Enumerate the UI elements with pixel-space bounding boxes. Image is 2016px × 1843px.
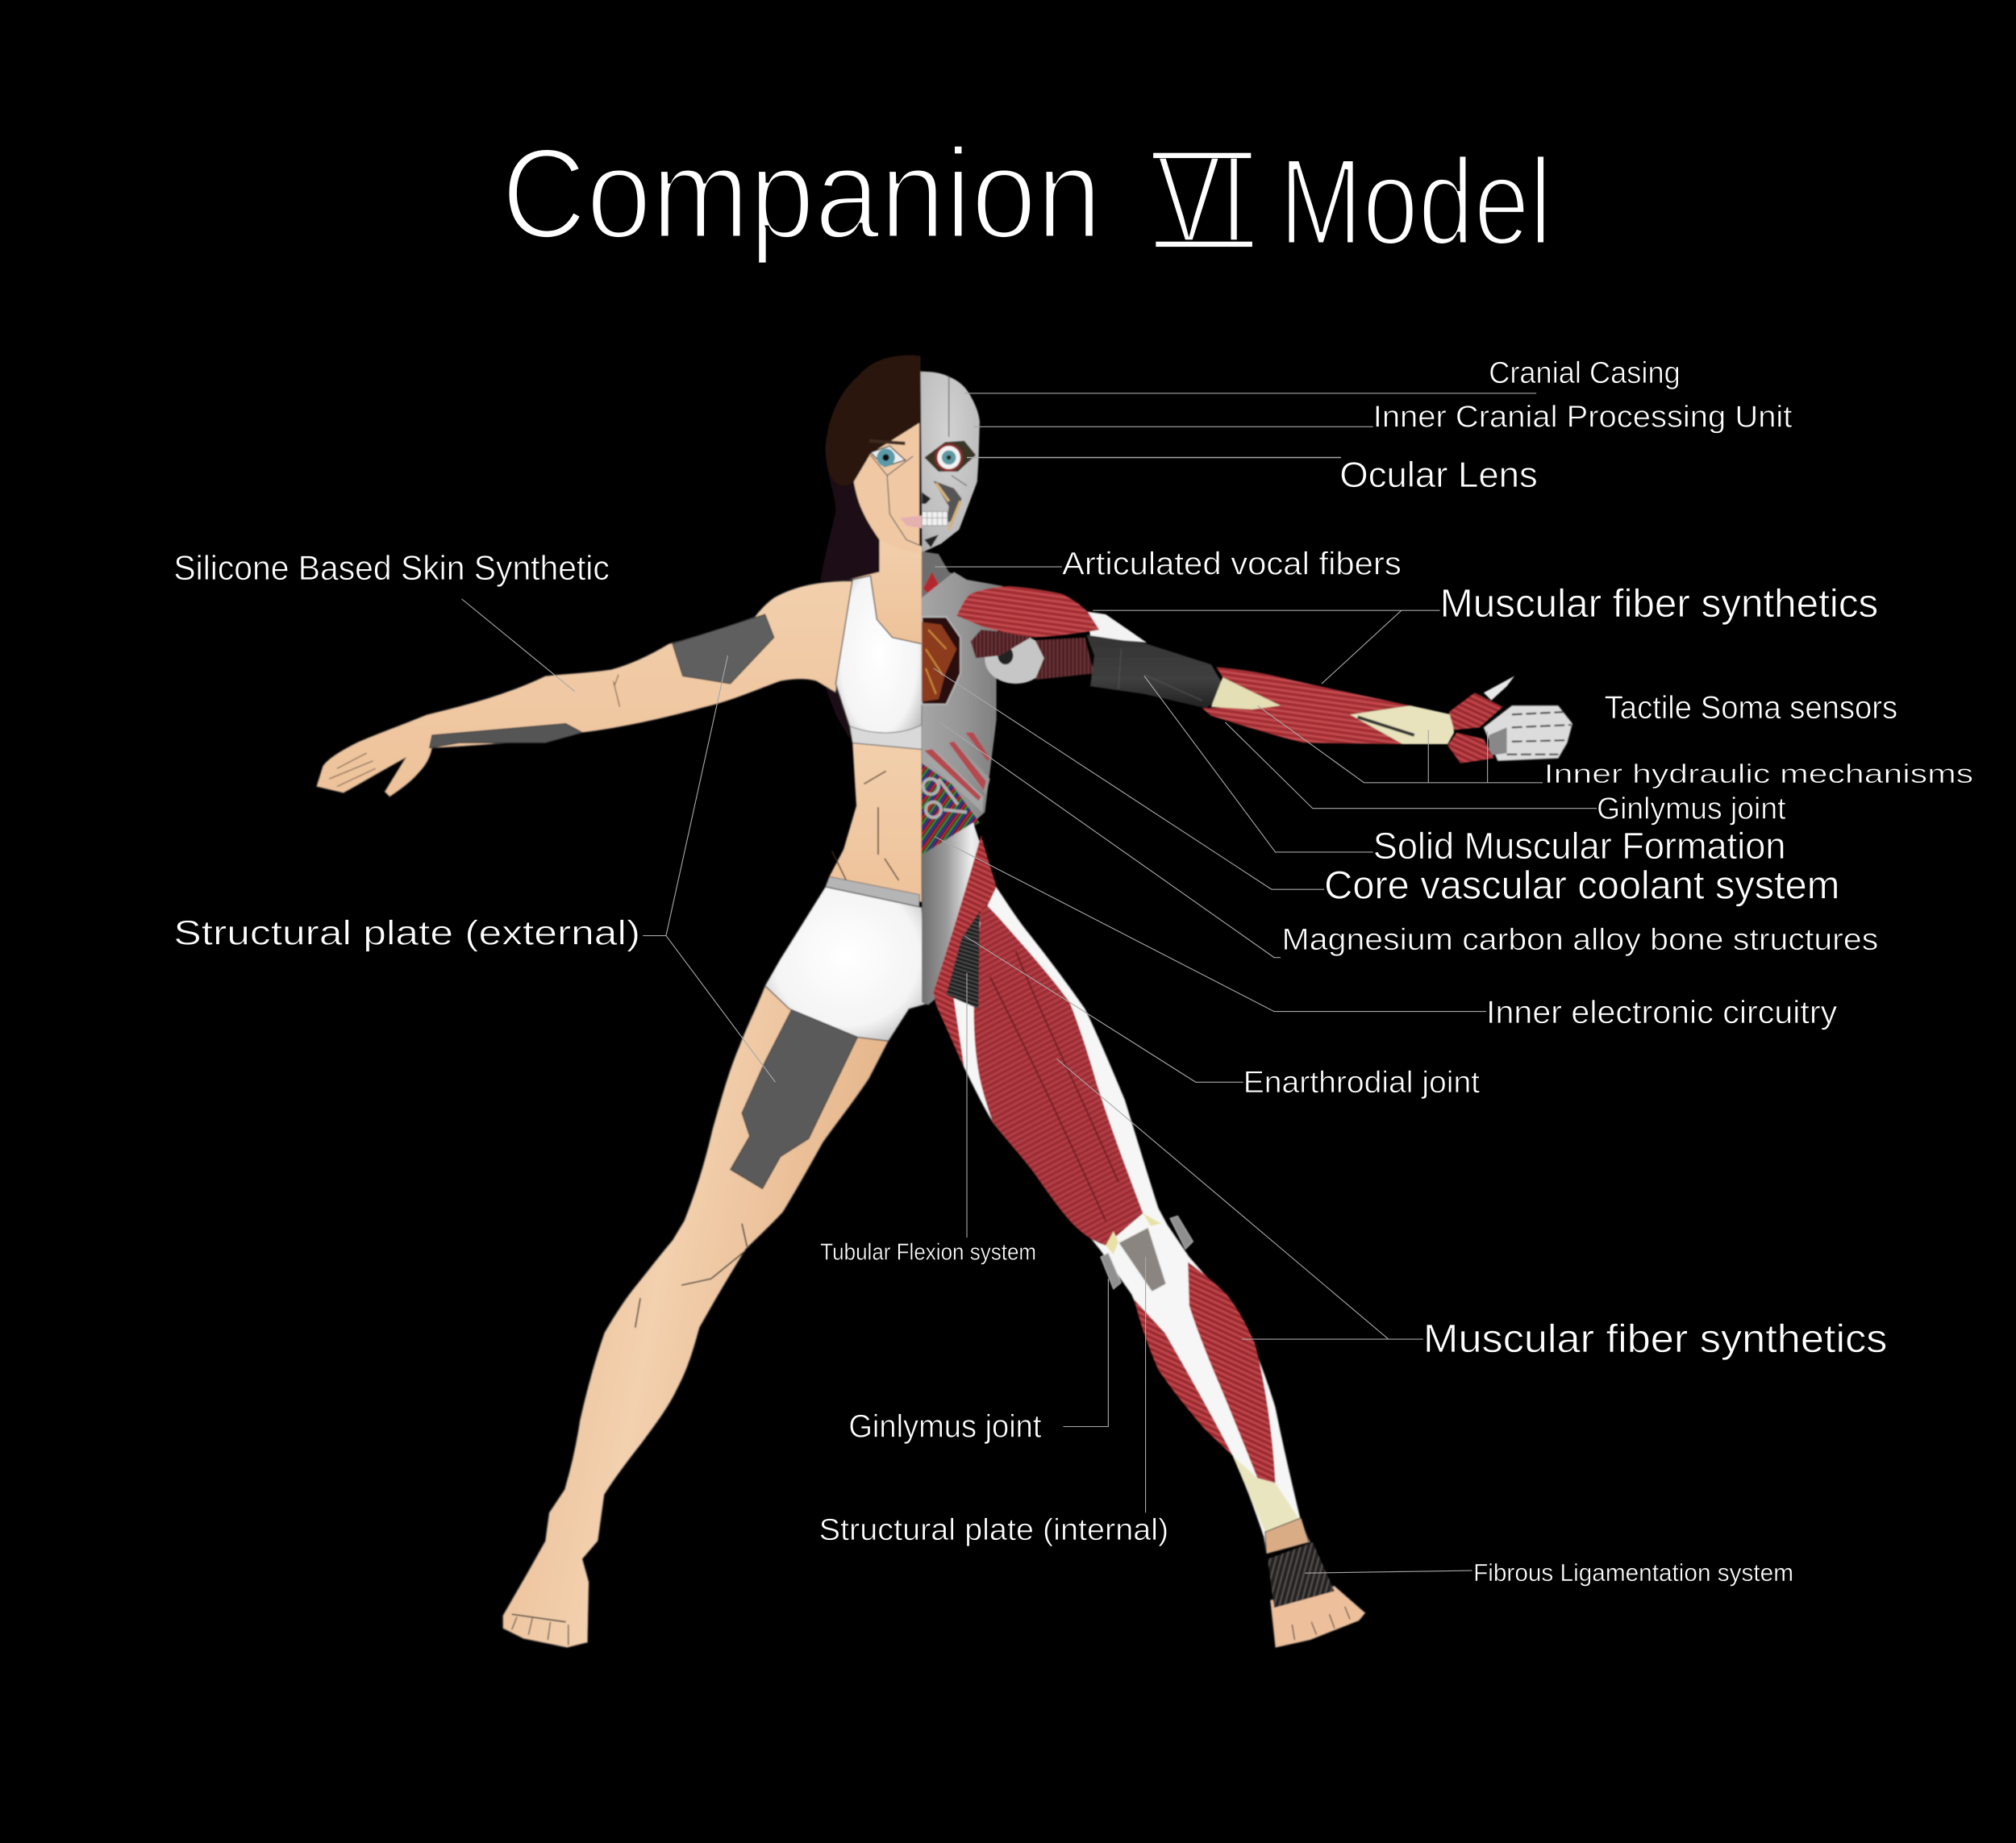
title: Companion xyxy=(502,122,1102,265)
thenar muscle xyxy=(1449,693,1503,730)
hair: back section xyxy=(820,356,921,739)
elbow tendon xyxy=(1211,677,1281,709)
hip casing xyxy=(922,822,993,1005)
ocular lens xyxy=(924,441,976,472)
white arm casing xyxy=(1088,612,1147,643)
elbow crease xyxy=(614,675,620,707)
forearm external plate xyxy=(430,724,582,748)
shorts waistband xyxy=(826,876,919,907)
knee joint side plates xyxy=(1101,1216,1193,1289)
fibrous ligament xyxy=(1268,1542,1335,1608)
label: Solid Muscular Formation: Solid Muscular Formation xyxy=(1373,825,1785,867)
joint socket xyxy=(998,647,1013,664)
upper arm external plate xyxy=(673,614,774,684)
deltoid muscle xyxy=(956,586,1099,638)
inner electronic circuitry xyxy=(946,911,980,1009)
label: Ginlymus joint (leg): Ginlymus joint xyxy=(848,1408,1041,1444)
hypothenar muscle xyxy=(1447,733,1494,763)
label: Inner hydraulic mechanisms: Inner hydraulic mechanisms xyxy=(1544,759,1973,789)
label: Structural plate (internal): Structural plate (internal) xyxy=(819,1512,1168,1547)
thumb bone xyxy=(1484,676,1514,701)
toes xyxy=(512,1616,569,1645)
forearm lower muscle xyxy=(1202,705,1402,744)
spine and gut rings xyxy=(923,779,967,817)
robotic neck xyxy=(922,551,967,597)
calf muscle xyxy=(1188,1262,1276,1483)
muscular rib strips xyxy=(924,733,990,801)
left leg xyxy=(503,986,889,1648)
chest casing xyxy=(922,572,1003,822)
label: Tubular Flexion system: Tubular Flexion system xyxy=(820,1239,1036,1265)
dark pectoral muscle xyxy=(971,630,1035,658)
jaw cavity and teeth xyxy=(922,481,962,547)
lips and face panel lines xyxy=(870,455,922,547)
foot skin xyxy=(1270,1586,1365,1648)
label: Fibrous Ligamentation system: Fibrous Ligamentation system xyxy=(1473,1560,1793,1587)
bra band shading xyxy=(850,725,922,749)
hand skeleton xyxy=(1484,705,1572,761)
ankle bands xyxy=(1265,1518,1309,1554)
sartorius muscle xyxy=(934,835,997,1068)
midriff xyxy=(829,743,922,902)
thigh muscle seams xyxy=(990,951,1118,1221)
thigh muscle xyxy=(974,901,1143,1246)
label: Enarthrodial joint: Enarthrodial joint xyxy=(1243,1065,1480,1100)
dark upper-arm muscle xyxy=(1035,638,1094,680)
title: VI xyxy=(1157,131,1248,268)
figure: human-skin half and robotic half xyxy=(316,356,1572,1648)
left arm xyxy=(316,581,852,797)
human eye xyxy=(869,441,905,467)
shorts xyxy=(765,887,927,1041)
label: Cranial Casing: Cranial Casing xyxy=(1489,356,1681,390)
solid muscular formation arm tube xyxy=(1086,635,1228,708)
title xyxy=(502,122,1552,271)
label: Articulated vocal fibers: Articulated vocal fibers xyxy=(1062,547,1402,582)
face skin xyxy=(854,422,919,552)
ankle tendons xyxy=(1233,1456,1301,1532)
heart xyxy=(922,617,960,705)
ligament highlights at knee xyxy=(1106,1213,1161,1254)
label: Core vascular coolant system: Core vascular coolant system xyxy=(1324,863,1839,907)
label: Structural plate (external): Structural plate (external) xyxy=(173,914,640,953)
knee detail lines xyxy=(512,1224,747,1622)
label: Ocular Lens: Ocular Lens xyxy=(1339,456,1538,495)
title: Model xyxy=(1279,133,1552,271)
forearm tendon xyxy=(1350,705,1454,744)
callout lines xyxy=(461,393,1597,1573)
label: Silicone Based Skin Synthetic: Silicone Based Skin Synthetic xyxy=(173,549,610,588)
label: Ginlymus joint (arm): Ginlymus joint xyxy=(1597,791,1786,826)
label: Magnesium carbon alloy bone structures: Magnesium carbon alloy bone structures xyxy=(1282,922,1878,957)
right leg base xyxy=(936,882,1310,1554)
neck and chest skin xyxy=(848,534,922,644)
rib bands xyxy=(924,740,990,812)
label: Muscular fiber synthetics (leg): Muscular fiber synthetics xyxy=(1423,1317,1887,1361)
label: Inner electronic circuitry: Inner electronic circuitry xyxy=(1486,995,1837,1030)
hair: front section xyxy=(826,356,921,486)
finger lines xyxy=(329,753,376,787)
bra xyxy=(835,576,922,749)
knee plate xyxy=(1118,1227,1166,1292)
skull casing xyxy=(921,372,980,552)
ball joint xyxy=(985,635,1047,684)
forearm upper muscle xyxy=(1216,667,1410,714)
gut circuitry xyxy=(922,763,980,857)
label: Inner Cranial Processing Unit: Inner Cranial Processing Unit xyxy=(1373,399,1793,434)
shin muscle xyxy=(1134,1300,1233,1456)
label: Tactile Soma sensors: Tactile Soma sensors xyxy=(1605,690,1897,726)
label: Muscular fiber synthetics (arm): Muscular fiber synthetics xyxy=(1440,581,1878,626)
right toes xyxy=(1292,1607,1350,1640)
thigh external plate xyxy=(731,1009,857,1189)
